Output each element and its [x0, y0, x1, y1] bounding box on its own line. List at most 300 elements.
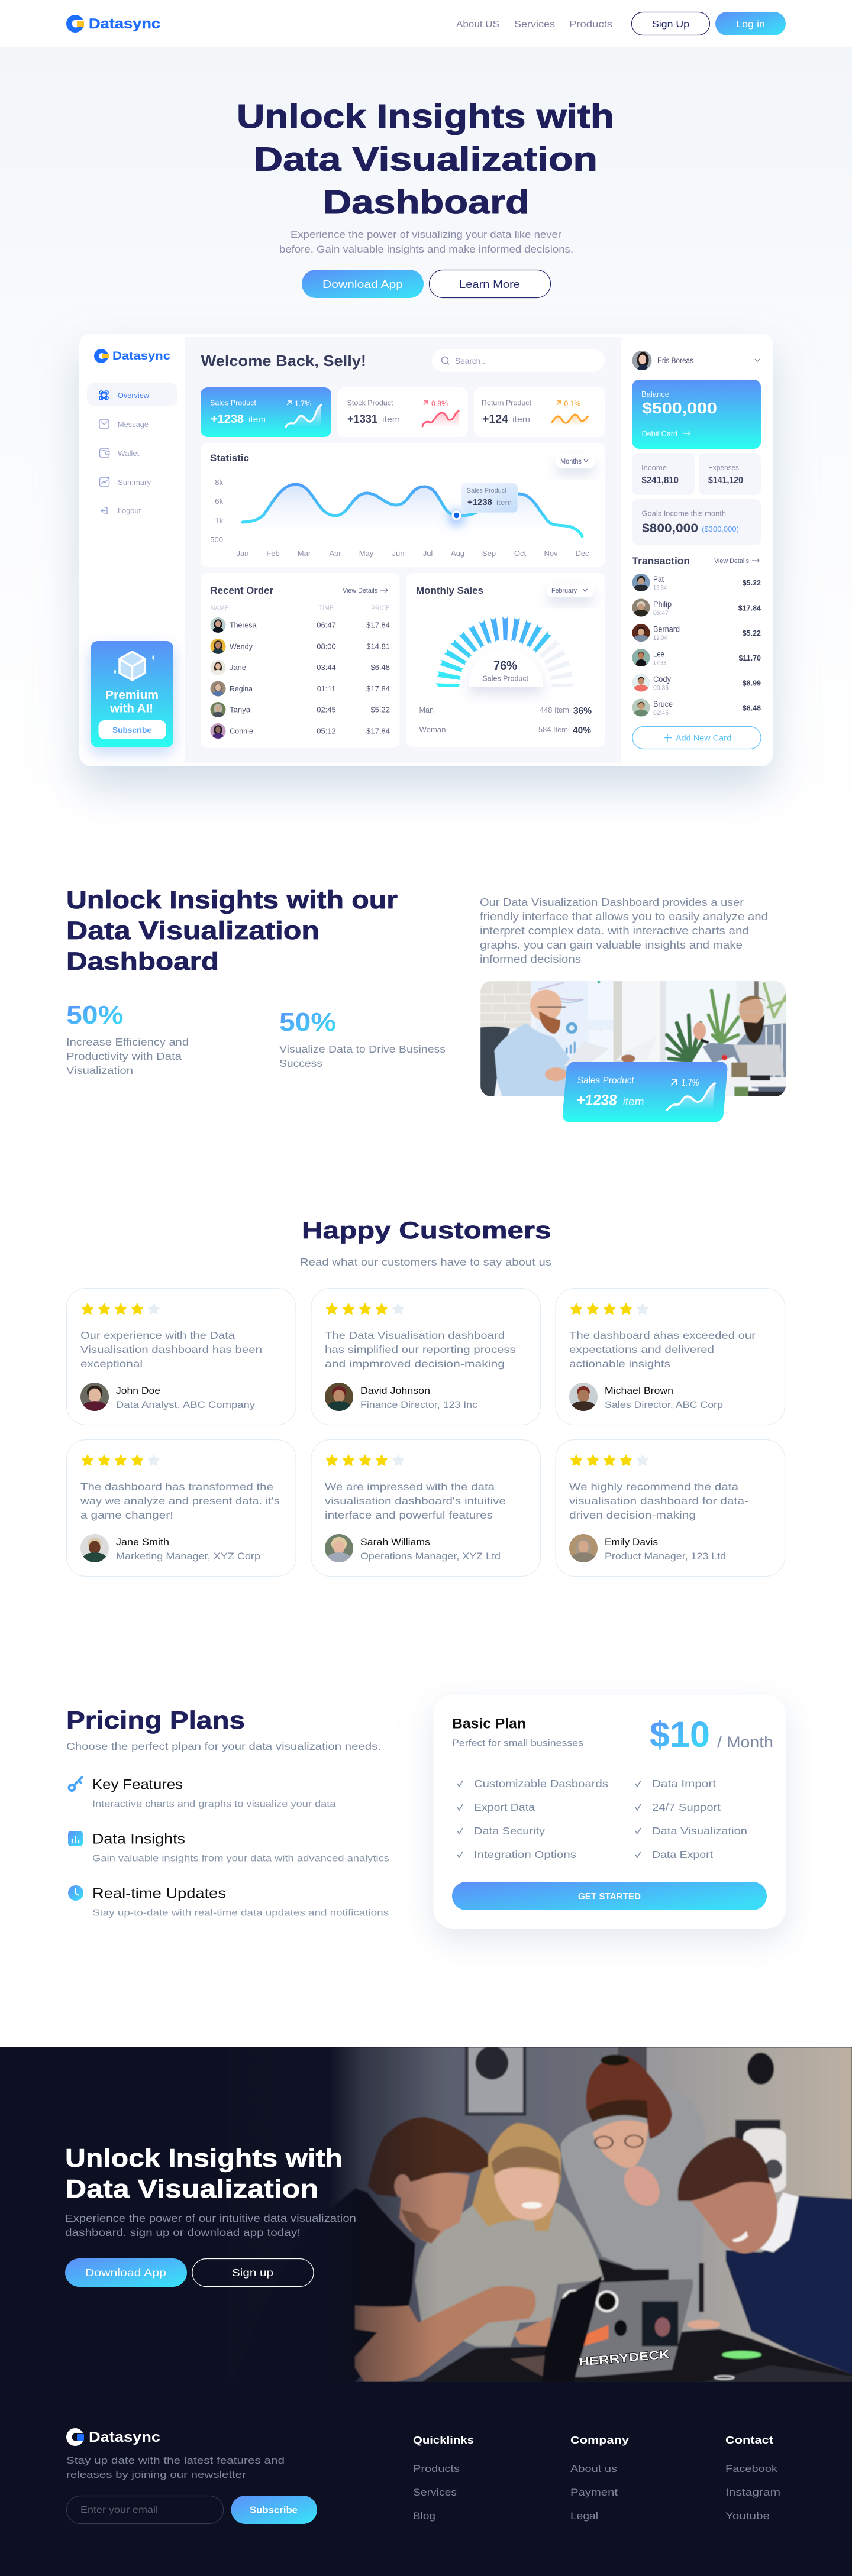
- hero title: [237, 98, 614, 221]
- goals tile: Goals Income this month: [641, 509, 726, 518]
- transaction: Cody: [632, 674, 761, 692]
- quote: [569, 1481, 748, 1521]
- section: unlock insights heading: Unlock Insights with our: [66, 886, 398, 914]
- blonde woman: [415, 2123, 604, 2346]
- x axis labels: Aug: [451, 549, 464, 558]
- hero title: Unlock Insights with: [237, 98, 614, 135]
- transaction: Lee: [632, 649, 761, 667]
- section description: graphs. you can gain valuable insights and make: [480, 939, 743, 951]
- x axis labels: [237, 549, 589, 558]
- get started button: GET STARTED: [578, 1892, 641, 1902]
- footer logo: [66, 2428, 160, 2446]
- transaction: Bruce: [632, 699, 761, 717]
- cta title: Data Visualization: [65, 2174, 318, 2203]
- man in navy sweater: [678, 2137, 852, 2374]
- transaction: Philip: [632, 598, 761, 617]
- area fill: [243, 484, 582, 541]
- row: Wendy: [211, 639, 390, 654]
- feature list: Export Data: [474, 1801, 535, 1813]
- row: Regina: [211, 681, 390, 697]
- pricing card: Basic Plan: [452, 1716, 526, 1732]
- sign up button: Sign Up: [652, 20, 689, 30]
- author: John Doe: [116, 1386, 160, 1396]
- author: Product Manager, 123 Ltd: [605, 1551, 726, 1562]
- goals tile: [632, 499, 761, 545]
- table header: NAME: [211, 605, 229, 612]
- sign up button: [632, 12, 710, 35]
- stat: 50 percent efficiency: Visualization: [66, 1064, 133, 1076]
- row: Theresa: Theresa: [230, 621, 257, 629]
- rating stars: [570, 1455, 648, 1465]
- laptop: [510, 2276, 693, 2382]
- tooltip: sales product: item: [496, 499, 512, 507]
- tooltip: sales product: [462, 483, 518, 513]
- hero description: Experience the power of visualizing your data like never: [291, 229, 561, 240]
- x axis labels: May: [359, 549, 374, 558]
- premium card: Premium: [105, 689, 159, 702]
- row: Tanya: 02:45: [317, 705, 336, 714]
- transaction: Pat: $5.22: [743, 579, 761, 587]
- stat: 50 percent efficiency: Increase Efficiency and: [66, 1036, 189, 1048]
- section: unlock insights heading: Data Visualization: [66, 917, 320, 945]
- floating sales card: item: [622, 1096, 645, 1108]
- goals tile: ($300,000): [702, 525, 739, 533]
- view details link: View Details: [343, 587, 377, 594]
- income tile: $241,810: [641, 475, 679, 486]
- months dropdown: [555, 454, 595, 468]
- row: Connie: Connie: [230, 726, 253, 736]
- feature: key features: Interactive charts and graphs to visualize your data: [92, 1799, 336, 1810]
- hero description: before. Gain valuable insights and make informed decisions.: [279, 244, 573, 255]
- menu item: wallet: Wallet: [118, 449, 140, 458]
- testimonial card: John Doe: [66, 1288, 296, 1425]
- man share row: Man: [419, 706, 434, 714]
- x axis labels: Dec: [575, 549, 589, 558]
- footer column: company: [570, 2434, 629, 2522]
- transaction: Pat: Pat: [653, 575, 664, 584]
- expenses tile: Expenses: [708, 463, 739, 472]
- button: learn more: [430, 270, 550, 298]
- floating sales card: [562, 1062, 728, 1122]
- panel: dashboard sidebar: [87, 349, 178, 747]
- avatar: [569, 1383, 598, 1411]
- quote: expectations and delivered: [569, 1344, 714, 1355]
- menu item: wallet: [99, 448, 140, 458]
- plants: [667, 983, 788, 1060]
- email input: [66, 2496, 224, 2524]
- quote: [80, 1481, 280, 1521]
- table header: TIME: [319, 605, 334, 612]
- quote: Our experience with the Data: [80, 1329, 235, 1341]
- transaction heading: View Details: [714, 558, 749, 565]
- quote: a game changer!: [80, 1509, 173, 1521]
- row: Connie: 05:12: [317, 726, 336, 736]
- row: Regina: 01:11: [317, 684, 335, 693]
- y axis labels: 500: [210, 535, 223, 544]
- feature list: Data Visualization: [652, 1825, 747, 1837]
- email input: Enter your email: [80, 2505, 158, 2515]
- rating stars: [82, 1455, 160, 1465]
- author: [116, 1537, 260, 1562]
- price: $10: [650, 1714, 710, 1755]
- sparkline: [667, 1083, 715, 1110]
- quote: visualisation dashboard's intuitive: [325, 1495, 506, 1507]
- rating stars: [327, 1455, 404, 1465]
- woman share row: 40%: [573, 726, 591, 736]
- x axis labels: Apr: [329, 549, 341, 558]
- row: Tanya: [211, 702, 390, 717]
- subscribe button: [231, 2496, 317, 2524]
- row: Wendy: Wendy: [230, 642, 253, 651]
- x axis labels: Sep: [482, 549, 496, 558]
- floating sales card: 1.7%: [681, 1077, 699, 1088]
- row: Tanya: Tanya: [230, 705, 251, 714]
- menu item: logout: Logout: [118, 506, 141, 515]
- y axis labels: 8k: [215, 478, 223, 487]
- premium card: with AI!: [109, 703, 153, 716]
- quote: We highly recommend the data: [569, 1481, 738, 1493]
- quote: The dashboard has transformed the: [80, 1481, 273, 1493]
- sparkline: [552, 415, 588, 426]
- menu item: summary: Summary: [118, 478, 151, 487]
- table header: [211, 605, 390, 612]
- transaction: Lee: Lee: [653, 649, 664, 659]
- months dropdown: Months: [560, 458, 582, 465]
- laptop sticker text: HERRYDECK: [578, 2348, 670, 2369]
- button: download app: Download App: [322, 279, 403, 290]
- man in black shirt: [334, 2116, 552, 2382]
- menu item: message: [99, 419, 149, 429]
- stat: 50 percent efficiency: 50%: [66, 1001, 123, 1030]
- stat card: stock product: +1331: [347, 413, 377, 426]
- author: Sarah Williams: [360, 1537, 430, 1548]
- author: Emily Davis: [605, 1537, 658, 1548]
- stat card: stock product: 0.8%: [431, 399, 448, 408]
- row: Theresa: 06:47: [317, 621, 336, 629]
- bald man: [494, 989, 570, 1096]
- stat: 50 percent efficiency: [66, 1001, 189, 1076]
- footer column: quicklinks: Services: [413, 2487, 457, 2498]
- panel: monthly sales gauge: Monthly Sales: [416, 585, 483, 596]
- feature: key features: [69, 1776, 336, 1810]
- quote: [80, 1329, 262, 1370]
- stat card: sales product: [201, 387, 331, 437]
- premium card: [91, 641, 173, 747]
- footer column: quicklinks: Products: [413, 2464, 460, 2474]
- section: unlock insights heading: [66, 886, 398, 976]
- transaction: Philip: 06:47: [653, 610, 669, 617]
- photo: team around laptop: [0, 2046, 852, 2382]
- user profile: [632, 351, 760, 370]
- balance card: [632, 380, 761, 449]
- subscribe button: [98, 720, 166, 739]
- tooltip: sales product: +1238: [467, 497, 492, 507]
- row: Jane: [211, 660, 390, 675]
- transaction: Bernard: $5.22: [743, 629, 761, 637]
- stat card: stock product: item: [382, 415, 400, 425]
- sparkline: [422, 411, 459, 427]
- sparkline: [286, 405, 321, 427]
- x axis labels: Jun: [392, 549, 404, 558]
- feature: data insights: Data Insights: [92, 1831, 185, 1847]
- row: Jane: Jane: [230, 663, 246, 672]
- feature: data insights: Gain valuable insights from your data with advanced analytics: [92, 1853, 389, 1864]
- x axis labels: Mar: [298, 549, 311, 558]
- author: [116, 1386, 256, 1410]
- x axis labels: Feb: [266, 549, 280, 558]
- y axis labels: [210, 478, 223, 544]
- transaction: Cody: 00:36: [653, 685, 669, 692]
- price: [650, 1714, 773, 1755]
- transaction: Bruce: 02:45: [653, 710, 669, 717]
- line series: [243, 484, 582, 536]
- quote: The Data Visualisation dashboard: [325, 1329, 505, 1341]
- logo: [66, 15, 160, 33]
- author: Michael Brown: [605, 1386, 673, 1396]
- log in button: Log in: [736, 20, 765, 30]
- row: Regina: Regina: [230, 684, 253, 693]
- stat card: stock product: Stock Product: [347, 399, 393, 407]
- y axis labels: 1k: [215, 516, 223, 525]
- footer column: contact: [725, 2434, 780, 2522]
- feature list: Data Export: [652, 1849, 713, 1860]
- nav links: Products: [569, 20, 612, 30]
- transaction heading: Transaction: [632, 555, 690, 567]
- menu item: overview: Overview: [118, 391, 150, 400]
- section description: Our Data Visualization Dashboard provides a user: [480, 897, 744, 908]
- button: download app: [302, 270, 424, 298]
- feature list: 24/7 Support: [652, 1801, 721, 1813]
- author: Jane Smith: [116, 1537, 169, 1548]
- man share row: [419, 706, 592, 716]
- transaction: Lee: $11.70: [738, 654, 761, 662]
- icon: bar chart: [68, 1831, 83, 1846]
- table: [421, 2329, 852, 2382]
- footer description: Stay up date with the latest features and: [66, 2455, 285, 2466]
- search field: Search..: [455, 356, 485, 365]
- section description: interpret complex data. with interactive charts and: [480, 925, 749, 937]
- footer column: contact: Youtube: [725, 2511, 770, 2522]
- feature list: Data Import: [652, 1778, 716, 1789]
- author: David Johnson: [360, 1386, 430, 1396]
- testimonial card: David Johnson: [311, 1288, 541, 1425]
- stat card: return product: 0.1%: [564, 399, 580, 408]
- transaction: Bruce: $6.48: [743, 704, 761, 712]
- footer description: releases by joining our newsletter: [66, 2469, 246, 2480]
- row: Connie: [211, 723, 390, 739]
- nav links: Services: [514, 20, 555, 30]
- stat card: sales product: Sales Product: [210, 399, 257, 407]
- income tile: [632, 453, 695, 495]
- row: Theresa: [211, 617, 390, 633]
- footer column: company: Payment: [570, 2487, 618, 2498]
- testimonial card: Sarah Williams: [311, 1439, 541, 1577]
- quote: We are impressed with the data: [325, 1481, 495, 1493]
- footer column: quicklinks: Quicklinks: [413, 2434, 474, 2446]
- feature: real-time updates: Stay up-to-date with real-time data updates and notifications: [92, 1908, 389, 1918]
- price: / Month: [717, 1733, 773, 1751]
- transaction: Philip: Philip: [653, 600, 672, 609]
- feature list: Integration Options: [474, 1849, 576, 1860]
- rating stars: [570, 1303, 648, 1314]
- quote: [325, 1329, 516, 1370]
- transaction: Bernard: 12:04: [653, 635, 667, 642]
- feature: data insights: [68, 1831, 389, 1864]
- footer column: contact: Contact: [725, 2434, 773, 2446]
- income tile: Income: [641, 463, 667, 472]
- panel: statistic line chart: Statistic: [210, 452, 249, 464]
- transaction: Philip: $17.84: [738, 604, 761, 613]
- stat card: sales product: item: [248, 415, 266, 425]
- rating stars: [327, 1303, 404, 1314]
- icon: clock: [68, 1885, 83, 1901]
- stat: 50 percent success: Visualize Data to Drive Business: [279, 1043, 446, 1055]
- panel: account column: [632, 351, 761, 749]
- icon: key: [69, 1777, 82, 1791]
- feature list: [457, 1778, 747, 1860]
- balance card: Balance: [641, 390, 669, 399]
- x axis labels: Oct: [514, 549, 526, 558]
- footer column: contact: Instagram: [725, 2487, 780, 2498]
- balance card: Debit Card: [641, 429, 677, 438]
- author: Data Analyst, ABC Company: [116, 1400, 256, 1410]
- user profile: Eris Boreas: [657, 356, 693, 365]
- add new card button: [632, 726, 761, 749]
- quote: Visualisation dashboard has been: [80, 1344, 262, 1355]
- section description: friendly interface that allows you to easily analyze and: [480, 911, 768, 923]
- stat: 50 percent success: 50%: [279, 1008, 336, 1037]
- menu item: overview: [87, 383, 178, 406]
- avatar: [325, 1383, 353, 1411]
- x axis labels: Jul: [423, 549, 433, 558]
- footer column: company: About us: [570, 2464, 617, 2474]
- stat: 50 percent success: Success: [279, 1057, 322, 1069]
- quote: exceptional: [80, 1358, 143, 1370]
- row: Wendy: 08:00: [317, 642, 336, 651]
- stat card: sales product: 1.7%: [295, 399, 311, 408]
- nav links: [456, 20, 612, 30]
- laptop and desk: [734, 1045, 784, 1075]
- logo: Datasync: [89, 16, 160, 32]
- panel: recent order table: Recent Order: [211, 585, 274, 596]
- menu item: logout: [101, 506, 141, 515]
- woman share row: Woman: [419, 725, 446, 734]
- pricing card: Perfect for small businesses: [452, 1739, 583, 1748]
- footer column: company: Legal: [570, 2511, 598, 2522]
- woman share row: [419, 725, 591, 736]
- cta button: sign up: Sign up: [232, 2267, 273, 2279]
- welcome heading: Welcome Back, Selly!: [201, 352, 366, 370]
- cta title: [65, 2144, 343, 2203]
- header navigation: [0, 0, 852, 47]
- highlighted data point: [450, 510, 464, 525]
- hero description: [279, 229, 573, 255]
- february dropdown: [547, 584, 594, 597]
- bearded man: [693, 996, 788, 1092]
- row: Wendy: $14.81: [366, 642, 390, 651]
- footer column: company: Company: [570, 2434, 629, 2446]
- author: Marketing Manager, XYZ Corp: [116, 1551, 260, 1562]
- transaction: Bernard: Bernard: [653, 624, 680, 634]
- wall poster: [465, 2046, 526, 2116]
- footer background: [0, 2382, 852, 2576]
- quote: [569, 1329, 756, 1370]
- author: [605, 1386, 723, 1410]
- transaction: Pat: 12:34: [653, 584, 667, 591]
- hero title: Dashboard: [323, 183, 530, 221]
- happy customers subtitle: Read what our customers have to say about us: [300, 1256, 551, 1268]
- floating sales card: +1238: [576, 1091, 618, 1109]
- feature: key features: Key Features: [92, 1776, 183, 1793]
- gauge center value: [469, 649, 543, 687]
- y axis labels: 6k: [215, 497, 223, 506]
- footer column: quicklinks: [413, 2434, 474, 2522]
- author: Sales Director, ABC Corp: [605, 1400, 723, 1410]
- gauge center value: 76%: [493, 658, 517, 673]
- quote: actionable insights: [569, 1358, 670, 1370]
- menu item: message: Message: [118, 420, 149, 429]
- sidebar logo: [94, 349, 170, 363]
- feature list: Data Security: [474, 1825, 545, 1837]
- expenses tile: [699, 453, 761, 495]
- button: learn more: Learn More: [459, 279, 520, 290]
- transaction: Pat: [632, 574, 761, 591]
- add new card button: Add New Card: [676, 733, 731, 743]
- author: [360, 1386, 477, 1410]
- testimonial card: Emily Davis: [556, 1439, 785, 1577]
- hero section background: [0, 47, 852, 852]
- subscribe button: Subscribe: [112, 725, 151, 734]
- hero title: Data Visualization: [254, 141, 598, 179]
- pricing card: [433, 1695, 786, 1929]
- row: Tanya: $5.22: [370, 705, 390, 714]
- cta description: dashboard. sign up or download app today!: [65, 2227, 301, 2238]
- avatar: [80, 1534, 109, 1562]
- quote: visualisation dashboard for data-: [569, 1495, 748, 1507]
- pricing subtitle: Choose the perfect plpan for your data visualization needs.: [66, 1740, 381, 1752]
- feature: real-time updates: Real-time Updates: [92, 1885, 226, 1902]
- transaction heading: [632, 555, 759, 567]
- stat card: sales product: +1238: [211, 413, 244, 426]
- stat card: return product: Return Product: [482, 399, 532, 407]
- testimonial card: Michael Brown: [556, 1288, 785, 1425]
- chair: [480, 1027, 510, 1096]
- floating sales card: Sales Product: [577, 1075, 635, 1086]
- row: Connie: $17.84: [366, 726, 390, 736]
- row: Regina: $17.84: [366, 684, 390, 693]
- woman with glasses: [561, 2055, 720, 2329]
- rating stars: [82, 1303, 160, 1314]
- footer column: quicklinks: Blog: [413, 2511, 435, 2522]
- stat card: return product: item: [512, 415, 530, 425]
- search field: [432, 349, 605, 372]
- menu item: summary: [99, 477, 151, 487]
- transaction: Bruce: Bruce: [653, 700, 673, 708]
- transaction: Bernard: [632, 624, 761, 642]
- transaction: Lee: 17:33: [653, 660, 666, 667]
- quote: way we analyze and present data. it's: [80, 1495, 280, 1507]
- row: Jane: $6.48: [370, 663, 390, 672]
- man share row: 36%: [573, 706, 592, 716]
- february dropdown: February: [551, 587, 577, 594]
- sidebar logo: Datasync: [112, 350, 170, 363]
- photo: office meeting: [480, 976, 788, 1102]
- quote: interface and powerful features: [325, 1509, 493, 1521]
- icon: cube: [114, 652, 154, 680]
- author: [360, 1537, 501, 1562]
- cta button: sign up: [192, 2259, 314, 2286]
- footer column: contact: Facebook: [725, 2464, 778, 2474]
